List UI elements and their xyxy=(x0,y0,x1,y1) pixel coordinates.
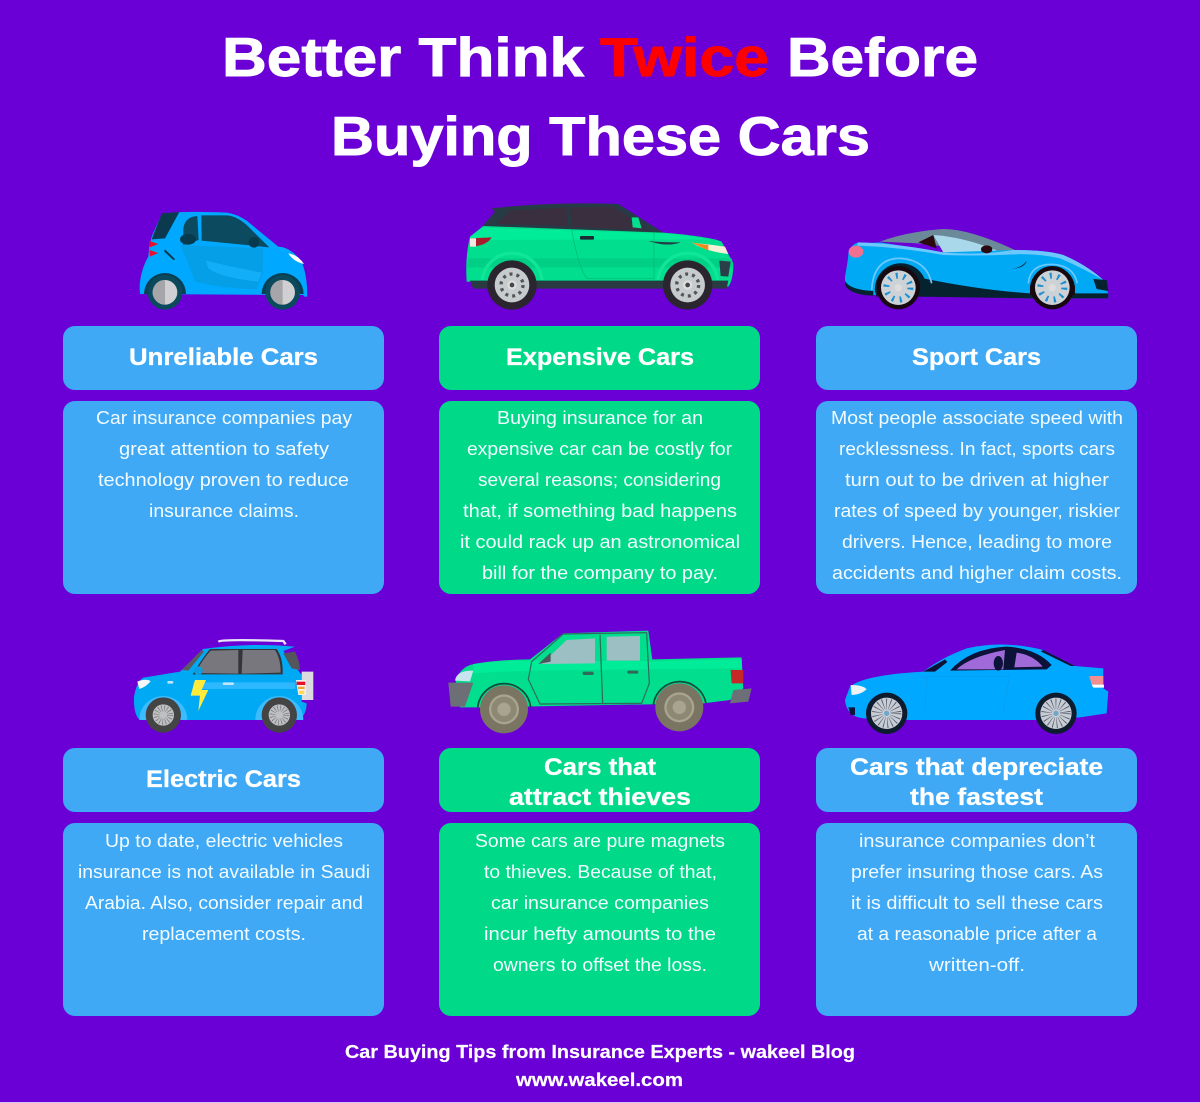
footer text: Car Buying Tips from Insurance Experts - wakeel Blog xyxy=(345,1042,855,1062)
heading: cars that depreciate the fastest: Cars that depreciate xyxy=(850,754,1103,781)
text block: unreliable cars: great attention to safety xyxy=(119,439,329,459)
text block: electric cars: insurance is not available in Saudi xyxy=(78,862,370,882)
text block: expensive cars xyxy=(439,401,760,594)
panel: cars that depreciate the fastest xyxy=(816,645,1137,1016)
text block: sport cars: recklessness. In fact, sports cars xyxy=(839,439,1115,459)
text block: sport cars: accidents and higher claim costs. xyxy=(832,563,1122,583)
text block: cars that attract thieves: incur hefty amounts to the xyxy=(484,924,716,944)
icon: small blue city car xyxy=(140,212,307,310)
heading: cars that depreciate the fastest xyxy=(816,748,1137,812)
footer text xyxy=(345,1042,855,1090)
icon: blue coupe xyxy=(845,645,1108,734)
text block: cars that depreciate the fastest: it is difficult to sell these cars xyxy=(851,893,1103,913)
heading: cars that attract thieves: Cars that xyxy=(544,754,656,781)
text block: electric cars: replacement costs. xyxy=(142,924,306,944)
text block: expensive cars: that, if something bad happens xyxy=(463,501,737,521)
text block: sport cars: turn out to be driven at higher xyxy=(845,470,1109,490)
heading: electric cars xyxy=(63,748,384,812)
text block: cars that depreciate the fastest: prefer insuring those cars. As xyxy=(851,862,1103,882)
panel: expensive cars xyxy=(439,203,760,594)
text block: cars that attract thieves: to thieves. Because of that, xyxy=(484,862,717,882)
text block: cars that attract thieves: car insurance companies xyxy=(491,893,709,913)
icon: green pickup truck xyxy=(448,631,752,733)
footer text: www.wakeel.com xyxy=(515,1070,683,1090)
panel: sport cars xyxy=(816,229,1137,594)
text block: expensive cars: it could rack up an astronomical xyxy=(460,532,740,552)
text block: electric cars: Arabia. Also, consider repair and xyxy=(85,893,363,913)
heading: cars that depreciate the fastest: the fastest xyxy=(910,784,1043,811)
heading: electric cars: Electric Cars xyxy=(146,766,301,793)
text block: unreliable cars: Car insurance companies pay xyxy=(96,408,352,428)
heading: sport cars xyxy=(816,326,1137,390)
heading: cars that attract thieves: attract thieves xyxy=(509,784,691,811)
text block: unreliable cars: insurance claims. xyxy=(149,501,299,521)
panel: cars that attract thieves xyxy=(439,631,760,1016)
heading: cars that attract thieves xyxy=(439,748,760,812)
heading: unreliable cars: Unreliable Cars xyxy=(129,344,318,371)
title: Better Think xyxy=(222,26,584,88)
icon: green SUV xyxy=(466,203,733,310)
text block: sport cars: drivers. Hence, leading to more xyxy=(842,532,1112,552)
text block: unreliable cars xyxy=(63,401,384,594)
heading: expensive cars xyxy=(439,326,760,390)
text block: electric cars: Up to date, electric vehicles xyxy=(105,831,343,851)
text block: cars that depreciate the fastest: at a reasonable price after a xyxy=(857,924,1098,944)
text block: expensive cars: expensive car can be costly for xyxy=(467,439,732,459)
text block: expensive cars: Buying insurance for an xyxy=(497,408,703,428)
title: Twice xyxy=(600,26,769,88)
title: Buying These Cars xyxy=(331,105,870,167)
text block: electric cars xyxy=(63,823,384,1016)
panel: electric cars xyxy=(63,640,384,1016)
text block: sport cars xyxy=(816,401,1137,594)
icon: blue electric car with lightning bolt xyxy=(134,640,313,733)
text block: cars that depreciate the fastest xyxy=(816,823,1137,1016)
text block: cars that depreciate the fastest: insurance companies don’t xyxy=(859,831,1095,851)
text block: sport cars: rates of speed by younger, riskier xyxy=(834,501,1120,521)
heading: unreliable cars xyxy=(63,326,384,390)
text block: cars that depreciate the fastest: written-off. xyxy=(928,955,1025,975)
text block: cars that attract thieves: Some cars are pure magnets xyxy=(475,831,725,851)
title: Before xyxy=(787,26,978,88)
icon: blue sports car xyxy=(845,229,1108,309)
text block: cars that attract thieves xyxy=(439,823,760,1016)
text block: sport cars: Most people associate speed with xyxy=(831,408,1123,428)
heading: sport cars: Sport Cars xyxy=(912,344,1041,371)
text block: expensive cars: bill for the company to pay. xyxy=(482,563,718,583)
panel: unreliable cars xyxy=(63,212,384,594)
heading: expensive cars: Expensive Cars xyxy=(506,344,694,371)
text block: expensive cars: several reasons; considering xyxy=(478,470,721,490)
text block: unreliable cars: technology proven to reduce xyxy=(98,470,349,490)
text block: cars that attract thieves: owners to offset the loss. xyxy=(493,955,707,975)
title xyxy=(222,26,978,167)
